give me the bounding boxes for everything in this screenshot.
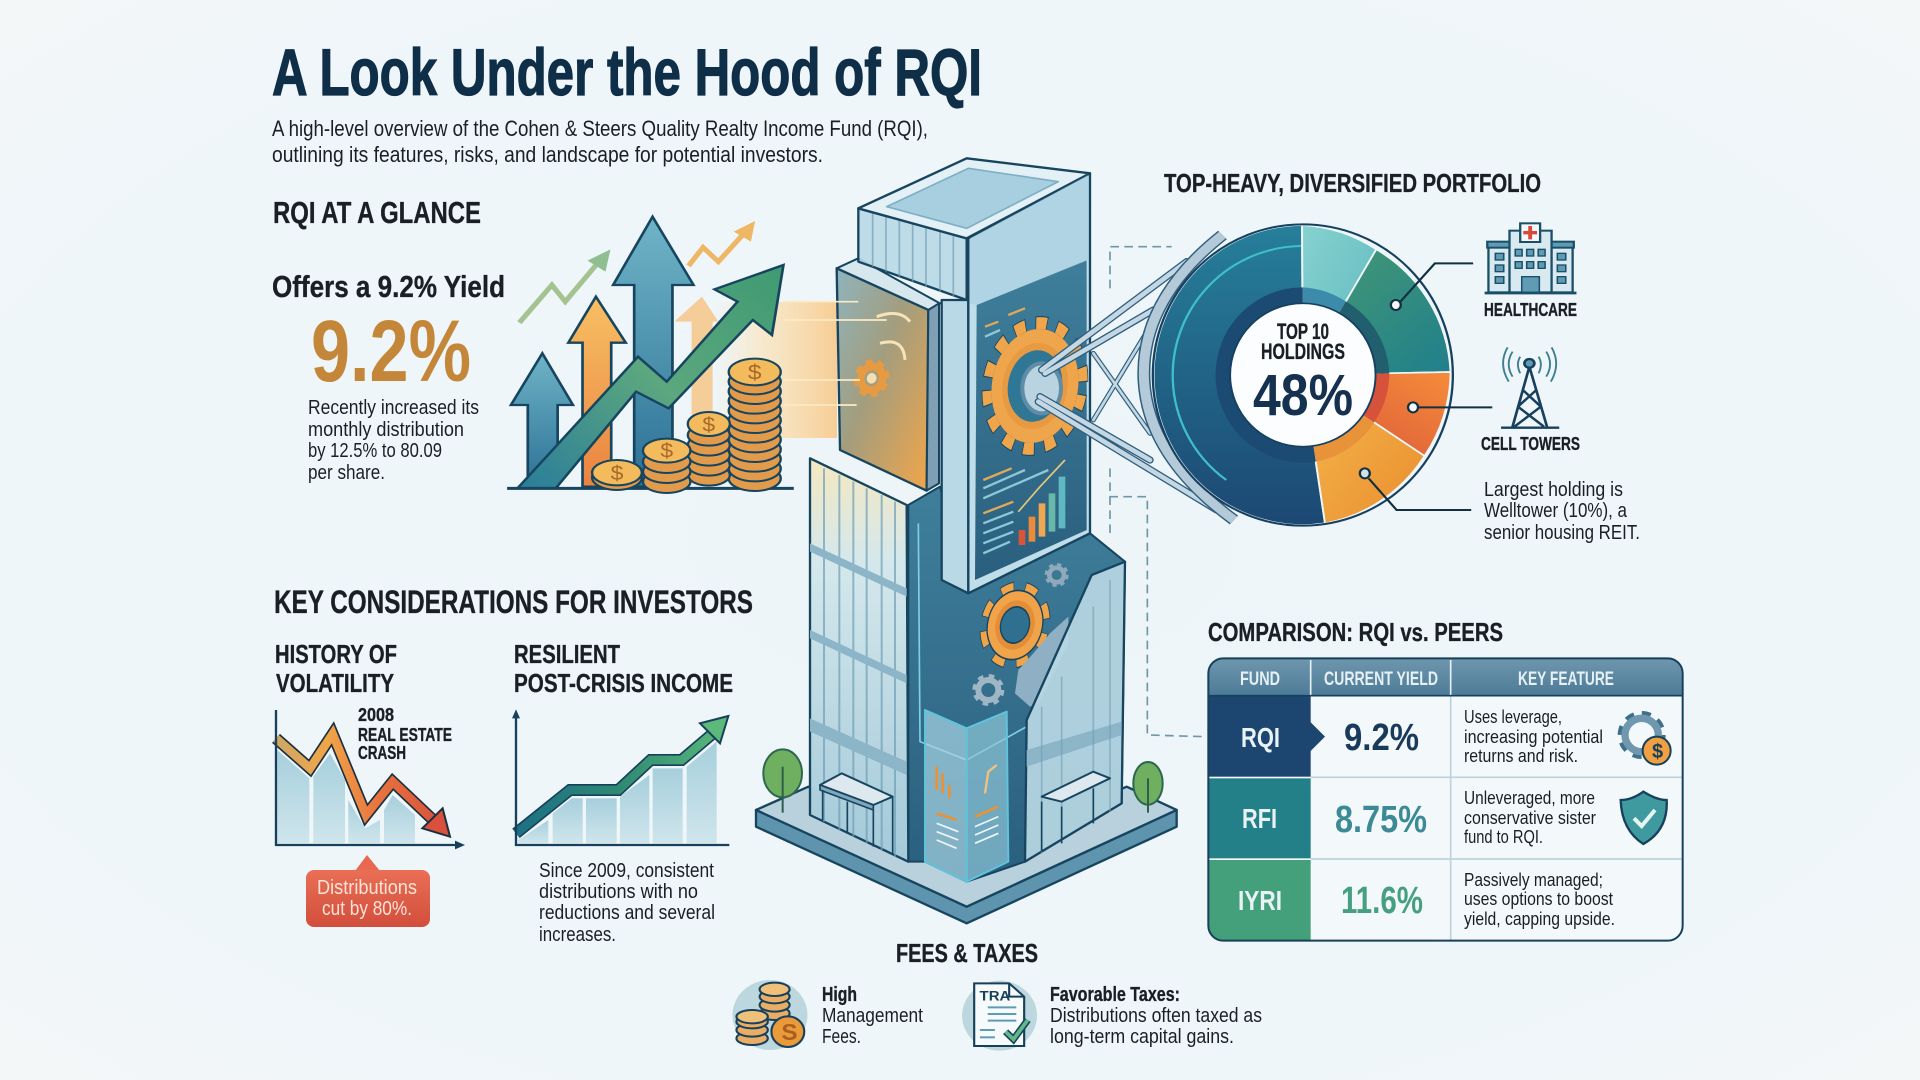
icon: coin stacks: S [781,1020,798,1045]
subtitle: outlining its features, risks, and landscape for potential investors. [272,142,823,167]
icon: rising arrows and coins [507,217,794,493]
leader lines [1360,263,1492,510]
icon: hospital [1485,223,1576,293]
panel: RQI at a glance [272,195,505,484]
icon: coin stacks [732,980,807,1050]
icon: gear with dollar coin: $ [1652,741,1663,763]
gear: small grey [975,677,1002,703]
donut label: TOP 10 [1277,319,1329,344]
row: RQI: returns and risk. [1464,746,1578,766]
chart annotation: 2008 crash [358,705,452,763]
callout: distributions cut: Distributions [317,877,417,899]
text: since 2009: Since 2009, consistent [539,860,714,882]
dashed connectors [1109,247,1205,737]
label: healthcare: HEALTHCARE [1484,300,1577,320]
callout: distributions cut [306,855,430,927]
text: largest holding: Welltower (10%), a [1484,500,1628,522]
text: high management fees: High [822,984,857,1006]
illustration: glass tower [756,158,1217,923]
donut chart: top 10 holdings [1144,224,1453,526]
text: high management fees [822,984,923,1048]
subtitle: A high-level overview of the Cohen & Steers Quality Realty Income Fund (RQI), [272,116,928,141]
row: RFI: 8.75% [1335,799,1427,841]
panel: key considerations [274,584,753,946]
panel: top-heavy portfolio [1144,168,1640,544]
heading: key considerations: KEY CONSIDERATIONS FOR INVESTORS [274,584,753,620]
row: IYRI: yield, capping upside. [1464,909,1615,929]
gear: lower orange [975,579,1055,671]
icon: cell tower [1501,347,1559,428]
big number: 9.2%: 9.2% [311,303,471,400]
chart: volatility line falling [276,710,465,849]
front glass display case [925,710,1008,882]
subheading: history of volatility [275,639,397,698]
icon: tax document: TRA [980,989,1011,1005]
text: favorable taxes: long-term capital gains. [1050,1026,1234,1048]
row: IYRI: IYRI [1238,885,1282,916]
text: since 2009: distributions with no [539,881,698,903]
table header [1240,669,1614,690]
subtitle [272,116,928,167]
row: RQI: RQI [1241,722,1280,753]
heading: RQI at a glance: RQI AT A GLANCE [273,195,481,230]
text: distribution increase [308,397,479,484]
infographic canvas [272,46,1684,1051]
heading: fees and taxes: FEES & TAXES [896,938,1038,968]
icon: rising arrows and coins: $ [702,414,715,436]
row: RFI: fund to RQI. [1464,827,1543,847]
gear: faint grey [1047,565,1067,585]
donut label [1253,319,1353,428]
subheading: resilient income [514,639,733,698]
donut label: 48% [1253,363,1353,428]
icon: rising arrows and coins: $ [611,462,623,485]
heading: comparison: COMPARISON: RQI vs. PEERS [1208,617,1503,647]
text: largest holding: Largest holding is [1484,479,1623,501]
row: IYRI [1238,870,1615,929]
table header: FUND [1240,669,1280,690]
table header: KEY FEATURE [1518,669,1614,690]
icon: shield [1621,792,1667,844]
text: distribution increase: per share. [308,462,385,484]
chart annotation: 2008 crash: REAL ESTATE [358,725,452,745]
lower left glass block [810,458,908,862]
upper tower [942,173,1093,593]
tree left [763,749,802,813]
icon: rising arrows and coins: $ [748,360,762,384]
text: largest holding: senior housing REIT. [1484,522,1640,544]
text: favorable taxes: Distributions often taxed as [1050,1005,1262,1027]
chart annotation: 2008 crash: 2008 [358,705,394,725]
text: largest holding [1484,479,1640,544]
subheading: yield: Offers a 9.2% Yield [272,269,505,304]
comparison table [1208,658,1683,941]
gear: large grey behind glass [1015,617,1068,707]
text: high management fees: Management [822,1005,923,1027]
panel: fees and taxes [732,938,1262,1051]
dashboard lines and mini chart [983,308,1065,553]
row: RFI: conservative sister [1464,808,1596,828]
row: RFI [1242,788,1667,847]
text: favorable taxes: Favorable Taxes: [1050,984,1180,1006]
tree right [1133,762,1163,813]
label: cell towers: CELL TOWERS [1481,434,1580,454]
data glow beam [714,302,837,438]
row: IYRI: 11.6% [1341,880,1423,922]
text: distribution increase: by 12.5% to 80.09 [308,440,442,462]
chart annotation: 2008 crash: CRASH [358,743,406,763]
row: RFI: RFI [1242,803,1277,834]
text: since 2009: increases. [539,924,616,946]
callout: distributions cut: cut by 80%. [322,898,412,920]
heading: portfolio: TOP-HEAVY, DIVERSIFIED PORTFOLIO [1164,168,1541,198]
row: RQI: increasing potential [1464,727,1603,747]
truss arm to donut [1038,262,1217,510]
row: RQI: Uses leverage, [1464,707,1562,727]
subheading: resilient income: POST-CRISIS INCOME [514,668,733,698]
row: IYRI: Passively managed; [1464,870,1603,890]
building base platform [756,787,1177,923]
title: A Look Under the Hood of RQI [272,35,982,109]
row: RFI: Unleveraged, more [1464,788,1595,808]
lower right glass block [1025,562,1125,862]
subheading: history of volatility: HISTORY OF [275,639,397,669]
subheading: resilient income: RESILIENT [514,639,620,669]
icon: gear with dollar coin [1621,714,1671,765]
text: distribution increase: Recently increased its [308,397,479,419]
icon: tax document [962,981,1037,1051]
donut label: HOLDINGS [1261,339,1345,364]
tower core [908,487,1125,882]
gear: main orange [977,315,1093,457]
panel: comparison RQI vs peers [1208,617,1683,941]
top glass box [858,158,1090,305]
middle block panel with orange glow [783,258,940,491]
table header: CURRENT YIELD [1324,669,1438,690]
row: RQI: 9.2% [1344,717,1419,759]
row: IYRI: uses options to boost [1464,889,1613,909]
subheading: history of volatility: VOLATILITY [276,668,394,698]
text: distribution increase: monthly distribution [308,419,464,441]
icon: rising arrows and coins: $ [660,440,673,462]
text: since 2009 [539,860,715,946]
chart: income line rising [512,709,729,845]
text: since 2009: reductions and several [539,902,715,924]
text: high management fees: Fees. [822,1026,861,1048]
row: RQI [1241,707,1671,766]
text: favorable taxes [1050,984,1262,1048]
